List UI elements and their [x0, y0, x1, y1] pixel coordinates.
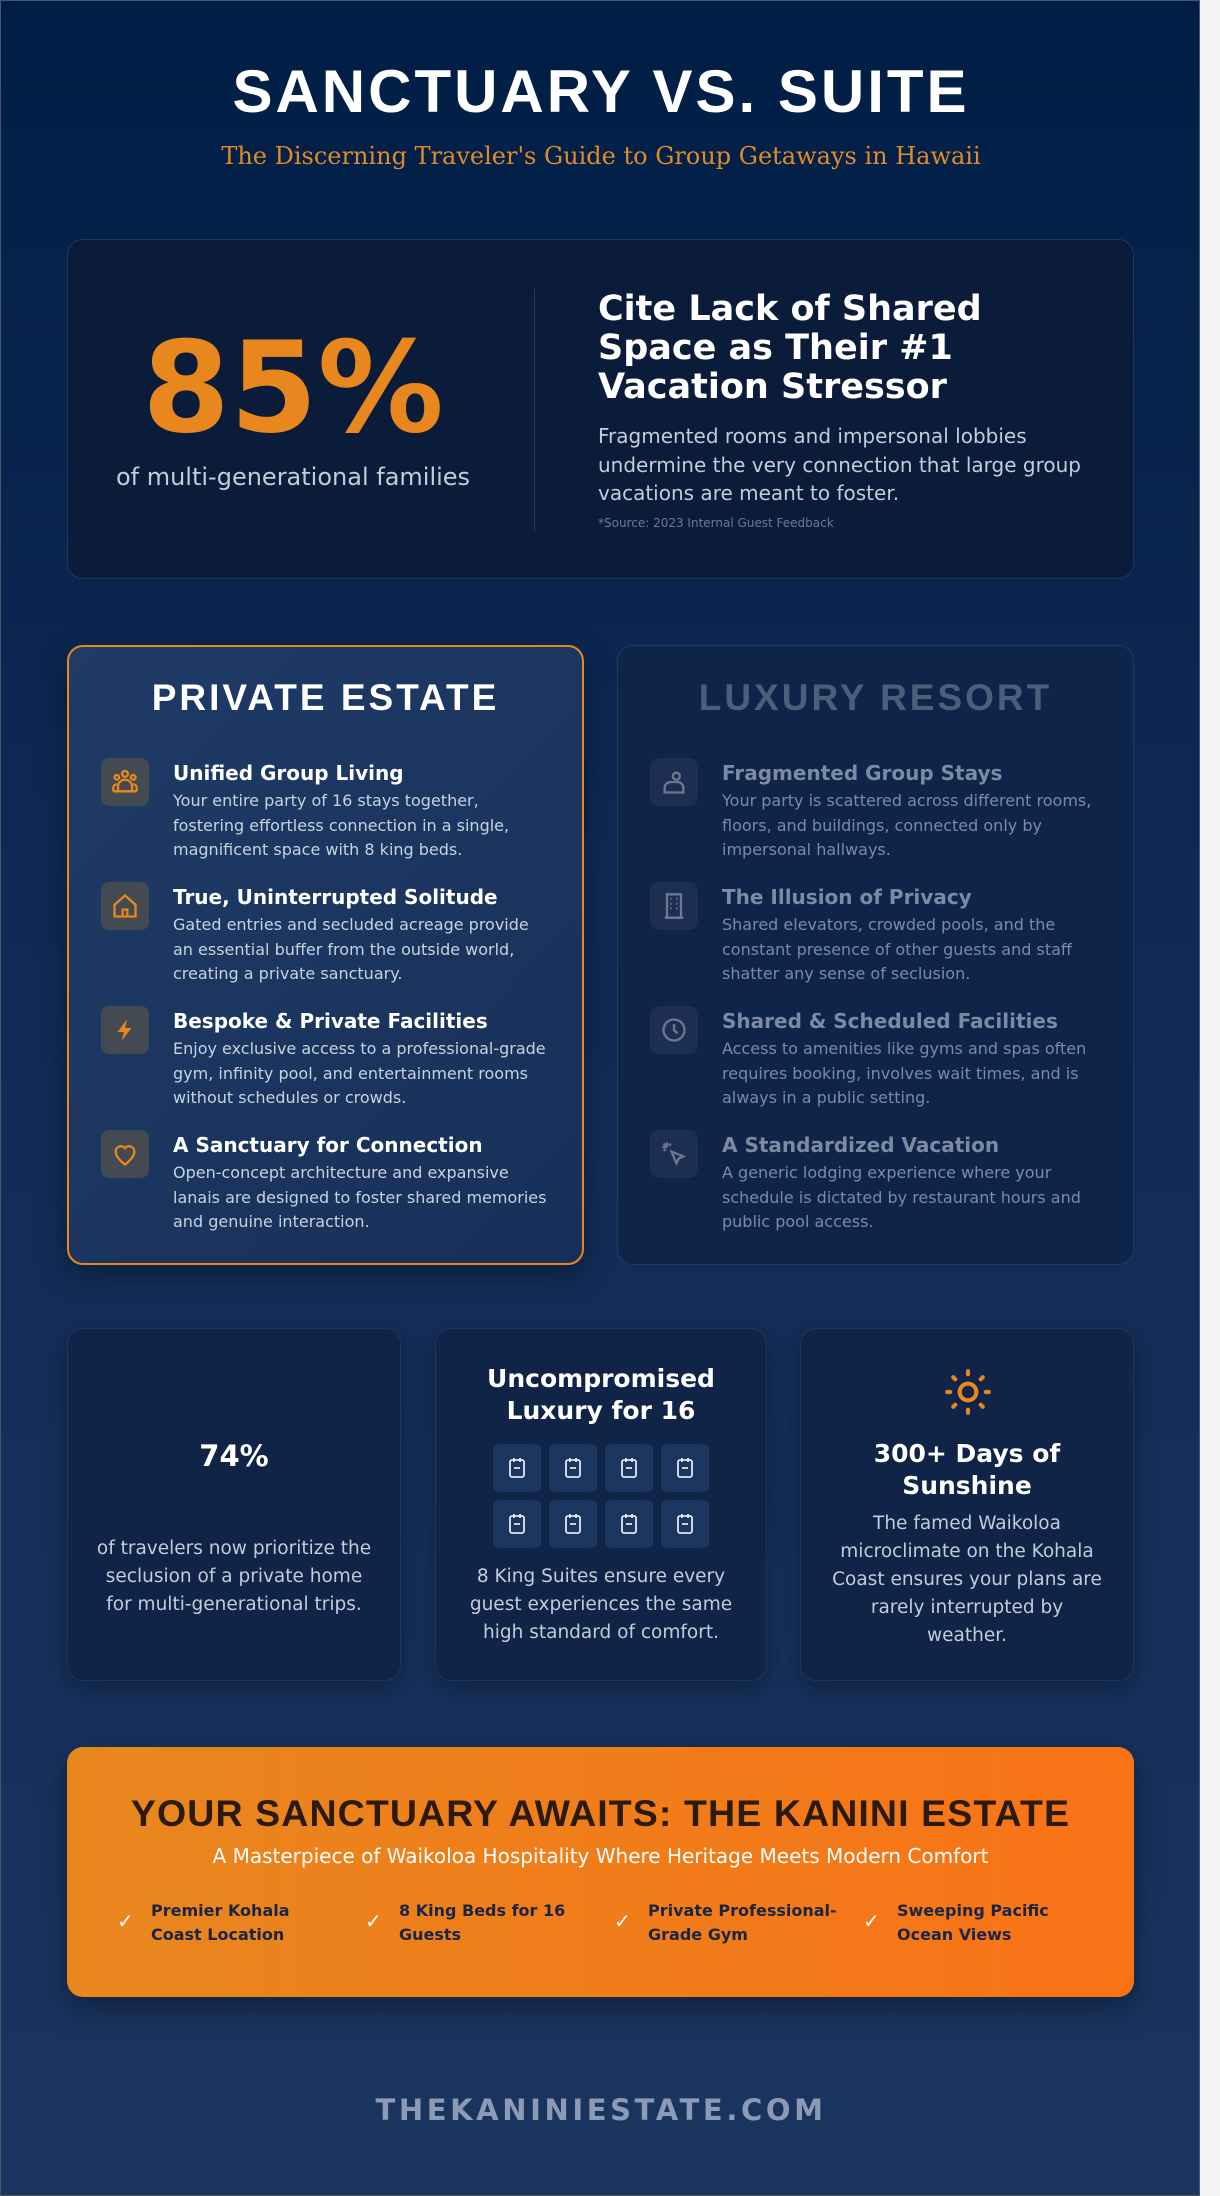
panel: call to action	[67, 1747, 1134, 1997]
item: scheduled	[650, 1006, 1086, 1107]
item: connection	[101, 1130, 546, 1231]
checklist item 2: 8 King Beds for 16	[399, 1901, 565, 1920]
item: privacy: The Illusion of Privacy	[722, 885, 972, 909]
item: solitude: Gated entries and secluded acreage provide an essential buffer from the outside world, creating a private sanctuary.	[173, 915, 529, 983]
cta heading: YOUR SANCTUARY AWAITS: THE KANINI ESTATE	[131, 1792, 1070, 1834]
item: solitude	[101, 882, 529, 983]
item: scheduled: Shared & Scheduled Facilities	[722, 1009, 1058, 1033]
item: unified group living: Your entire party of 16 stays together, fostering effortless connection in a single, magnificent space with 8 king beds.	[173, 791, 509, 859]
heading: Sunshine	[902, 1471, 1032, 1500]
item: facilities	[101, 1006, 546, 1107]
title: SANCTUARY VS. SUITE	[232, 58, 970, 125]
heading: Luxury for 16	[507, 1396, 695, 1425]
icon: sun	[945, 1369, 991, 1415]
item: fragmented: Fragmented Group Stays	[722, 761, 1002, 785]
item: facilities: Bespoke & Private Facilities	[173, 1009, 488, 1033]
heading: Uncompromised	[487, 1364, 715, 1393]
subtitle: The Discerning Traveler's Guide to Group Getaways in Hawaii	[221, 142, 981, 170]
item: connection: Open-concept architecture and expansive lanais are designed to foster shared memories and genuine interaction.	[173, 1163, 546, 1231]
checklist item 4: ✓	[863, 1909, 880, 1933]
checklist item 3: Private Professional-	[648, 1901, 837, 1920]
checklist item 4	[863, 1901, 1049, 1944]
checklist item 3	[614, 1901, 837, 1944]
checklist item 2: Guests	[399, 1925, 461, 1944]
checklist item 4: Ocean Views	[897, 1925, 1011, 1944]
checklist item 1	[117, 1901, 290, 1944]
panel: luxury resort	[617, 645, 1134, 1265]
panel: luxury for 16	[435, 1328, 767, 1681]
icon: group	[101, 758, 149, 806]
item: unified group living	[101, 758, 509, 859]
icon grid: 8 king suites	[493, 1444, 709, 1548]
icon: person	[650, 758, 698, 806]
item: solitude: True, Uninterrupted Solitude	[173, 885, 498, 909]
item: standardized: A Standardized Vacation	[722, 1133, 999, 1157]
item: privacy	[650, 882, 1072, 983]
item: unified group living: Unified Group Living	[173, 761, 404, 785]
stat text: of travelers now prioritize the seclusion of a private home for multi-generational trips.	[97, 1538, 371, 1615]
heading	[487, 1364, 715, 1425]
icon: bolt	[101, 1006, 149, 1054]
source note: *Source: 2023 Internal Guest Feedback	[598, 516, 834, 530]
item: scheduled: Access to amenities like gyms and spas often requires booking, involves wait times, and is always in a public setting.	[722, 1039, 1086, 1107]
checklist item 3: ✓	[614, 1909, 631, 1933]
icon: clock	[650, 1006, 698, 1054]
stat caption: of multi-generational families	[116, 463, 470, 491]
description: The famed Waikoloa microclimate on the Kohala Coast ensures your plans are rarely interrupted by weather.	[832, 1513, 1102, 1646]
panel: key statistic	[67, 239, 1134, 579]
heading: 300+ Days of	[874, 1439, 1060, 1468]
stat description: Fragmented rooms and impersonal lobbies undermine the very connection that large group vacations are meant to foster.	[598, 424, 1081, 505]
item: privacy: Shared elevators, crowded pools, and the constant presence of other guests and staff shatter any sense of seclusion.	[722, 915, 1072, 983]
big stat 85%: 85%	[142, 314, 444, 461]
item: fragmented	[650, 758, 1091, 859]
stat 74%: 74%	[199, 1439, 269, 1473]
item: facilities: Enjoy exclusive access to a professional-grade gym, infinity pool, and entertainment rooms without schedules or crowds.	[173, 1039, 546, 1107]
checklist item 1: ✓	[117, 1909, 134, 1933]
icon: building	[650, 882, 698, 930]
description: 8 King Suites ensure every guest experiences the same high standard of comfort.	[470, 1566, 732, 1643]
item: standardized	[650, 1130, 1081, 1231]
heading: private estate: PRIVATE ESTATE	[152, 677, 499, 718]
heading	[874, 1439, 1060, 1500]
item: connection: A Sanctuary for Connection	[173, 1133, 483, 1157]
icon: cursor	[650, 1130, 698, 1178]
footer url: THEKANINIESTATE.COM	[375, 2093, 827, 2127]
checklist item 4: Sweeping Pacific	[897, 1901, 1049, 1920]
panel: sunshine	[800, 1328, 1134, 1681]
icon: house	[101, 882, 149, 930]
panel: 74% stat	[67, 1328, 401, 1681]
heading: luxury resort: LUXURY RESORT	[699, 677, 1052, 718]
checklist item 3: Grade Gym	[648, 1925, 748, 1944]
stat heading: Cite Lack of Shared Space as Their #1 Vacation Stressor	[598, 289, 982, 407]
checklist item 1: Premier Kohala	[151, 1901, 290, 1920]
item: fragmented: Your party is scattered across different rooms, floors, and buildings, connected only by impersonal hallways.	[722, 791, 1091, 859]
icon: heart	[101, 1130, 149, 1178]
item: standardized: A generic lodging experience where your schedule is dictated by restaurant hours and public pool access.	[722, 1163, 1081, 1231]
checklist item 2: ✓	[365, 1909, 382, 1933]
checklist item 1: Coast Location	[151, 1925, 284, 1944]
panel: private estate	[67, 645, 584, 1265]
cta subtitle: A Masterpiece of Waikoloa Hospitality Where Heritage Meets Modern Comfort	[213, 1844, 988, 1868]
checklist item 2	[365, 1901, 565, 1944]
